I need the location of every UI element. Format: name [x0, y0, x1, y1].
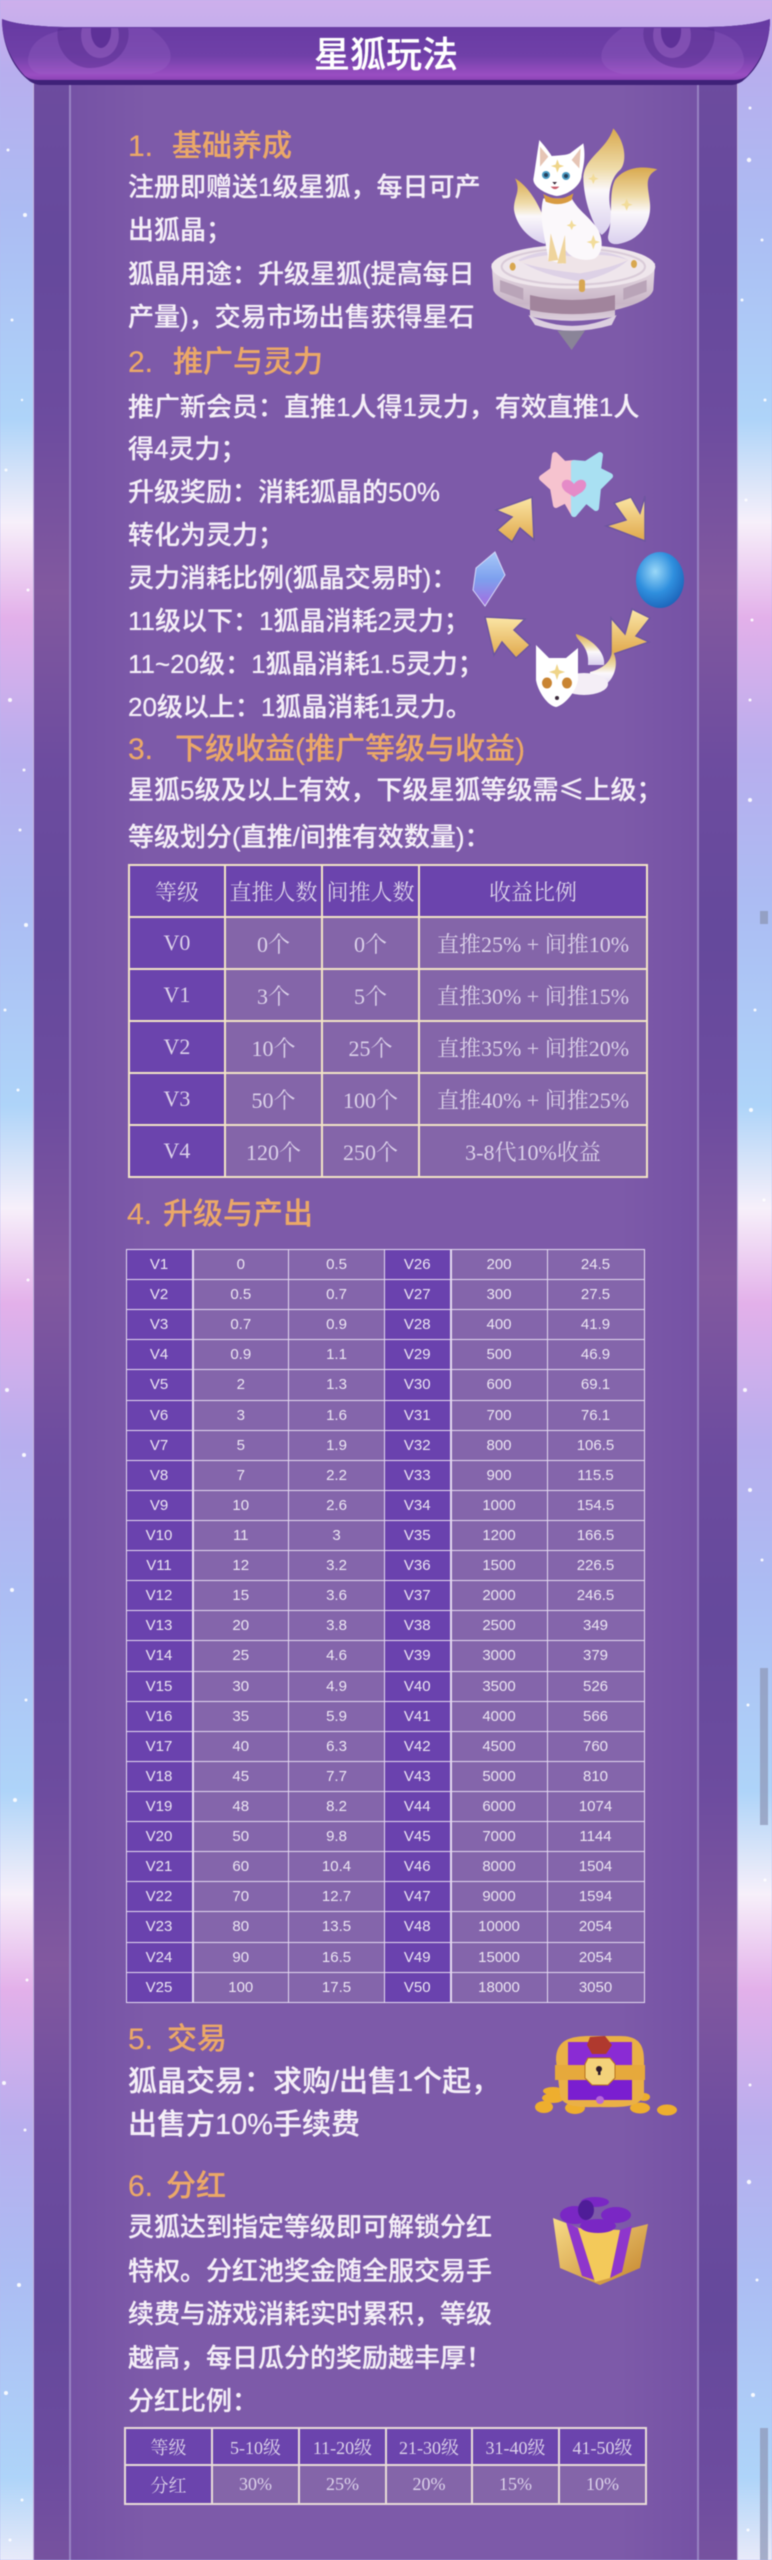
upgrade and output table: 106.5 [577, 1437, 614, 1454]
text block 1: 产量)，交易市场出售获得星石 [128, 302, 475, 332]
arrow: bottom left [485, 617, 530, 658]
upgrade and output table: 9000 [482, 1888, 516, 1905]
upgrade and output table: V18 [146, 1768, 172, 1785]
upgrade and output table: 7000 [482, 1828, 516, 1845]
upgrade and output table: V38 [404, 1617, 431, 1634]
upgrade and output table: 226.5 [577, 1557, 614, 1574]
heading 5: 5. [128, 2023, 153, 2056]
upgrade and output table: V41 [404, 1708, 431, 1725]
dividend table: 11-20级 [313, 2438, 372, 2458]
text block 6: 灵狐达到指定等级即可解锁分红 [128, 2212, 492, 2242]
text block 5: 出售方10%手续费 [128, 2109, 360, 2141]
upgrade and output table: 0.5 [326, 1256, 347, 1273]
upgrade and output table: 9.8 [326, 1828, 347, 1845]
level table: 直推40% + 间推25% [437, 1088, 629, 1112]
upgrade and output table: 60 [232, 1858, 249, 1875]
upgrade and output table: V7 [150, 1437, 168, 1454]
arrow: top right [606, 496, 645, 541]
upgrade and output table: V8 [150, 1467, 168, 1484]
upgrade and output table: 7.7 [326, 1768, 347, 1785]
dividend table: 41-50级 [572, 2438, 632, 2458]
dividend table [123, 2426, 648, 2506]
upgrade and output table: V47 [404, 1888, 431, 1905]
upgrade and output table: V40 [404, 1678, 431, 1695]
upgrade and output table: 900 [486, 1467, 512, 1484]
upgrade and output table: 379 [583, 1647, 608, 1664]
upgrade and output table: 800 [486, 1437, 512, 1454]
upgrade and output table: 45 [232, 1768, 249, 1785]
upgrade and output table: V32 [404, 1437, 431, 1454]
upgrade and output table: V6 [150, 1407, 168, 1424]
upgrade and output table: 500 [486, 1346, 512, 1363]
text block 2: 11~20级：1狐晶消耗1.5灵力； [128, 649, 484, 679]
upgrade and output table: 526 [583, 1678, 608, 1695]
upgrade and output table: 400 [486, 1316, 512, 1333]
upgrade and output table: 10 [232, 1497, 249, 1514]
dividend table: 10% [586, 2474, 619, 2494]
upgrade and output table: V48 [404, 1918, 431, 1935]
upgrade and output table: V20 [146, 1828, 172, 1845]
upgrade and output table: 18000 [478, 1979, 520, 1996]
fox collar [543, 193, 573, 204]
upgrade and output table: 25 [232, 1647, 249, 1664]
dividend table: 20% [412, 2474, 446, 2494]
heading 4: 4. [127, 1198, 152, 1231]
heading 1: 1. [128, 130, 153, 163]
upgrade and output table: V35 [404, 1527, 431, 1544]
upgrade and output table: 35 [232, 1708, 249, 1725]
level table: 3-8代10%收益 [465, 1140, 601, 1164]
upgrade and output table: 0.9 [230, 1346, 251, 1363]
heading 4: 升级与产出 [163, 1198, 313, 1231]
upgrade and output table: V42 [404, 1738, 431, 1755]
text block 2: 11级以下：1狐晶消耗2灵力； [128, 606, 470, 636]
upgrade and output table: 700 [486, 1407, 512, 1424]
upgrade and output table: 2000 [482, 1587, 516, 1604]
upgrade and output table: 810 [583, 1768, 608, 1785]
upgrade and output table: 3000 [482, 1647, 516, 1664]
upgrade and output table: 2500 [482, 1617, 516, 1634]
upgrade and output table: 115.5 [577, 1467, 614, 1484]
level table: 250个 [343, 1140, 398, 1164]
dividend table: 25% [326, 2474, 359, 2494]
upgrade and output table: 1500 [482, 1557, 516, 1574]
text block 6: 分红比例： [128, 2386, 258, 2416]
upgrade and output table: 2054 [579, 1949, 612, 1966]
upgrade and output table: 3 [237, 1407, 245, 1424]
dividend table: 15% [499, 2474, 532, 2494]
upgrade and output table: V1 [150, 1256, 168, 1273]
text block 6: 续费与游戏消耗实时累积，等级 [128, 2299, 492, 2329]
upgrade and output table: 0 [237, 1256, 245, 1273]
upgrade and output table: V46 [404, 1858, 431, 1875]
upgrade and output table: V21 [146, 1858, 172, 1875]
icon: fox on pedestal [491, 128, 657, 350]
level table: 10个 [251, 1036, 296, 1060]
upgrade and output table: 3.8 [326, 1617, 347, 1634]
heading 3: 3. [128, 733, 153, 766]
upgrade and output table: V27 [404, 1286, 431, 1303]
upgrade and output table: 12 [232, 1557, 249, 1574]
upgrade and output table [125, 1248, 646, 2004]
main content panel [69, 82, 699, 2560]
level table: 直推35% + 间推20% [437, 1036, 629, 1060]
heading 5: 交易 [167, 2023, 227, 2056]
upgrade and output table: 17.5 [322, 1979, 351, 1996]
upgrade and output table: V49 [404, 1949, 431, 1966]
upgrade and output table: 166.5 [577, 1527, 614, 1544]
title: 星狐玩法 [314, 34, 458, 75]
upgrade and output table: 20 [232, 1617, 249, 1634]
upgrade and output table: V29 [404, 1346, 431, 1363]
upgrade and output table: 154.5 [577, 1497, 614, 1514]
upgrade and output table: 76.1 [581, 1407, 610, 1424]
icon: growth cycle [473, 455, 684, 707]
text block 1 [128, 172, 480, 332]
upgrade and output table: V45 [404, 1828, 431, 1845]
level table: 等级 [155, 880, 199, 904]
text block 5: 狐晶交易：求购/出售1个起， [128, 2066, 500, 2098]
upgrade and output table: 760 [583, 1738, 608, 1755]
upgrade and output table: 11 [233, 1527, 249, 1544]
level table: 50个 [251, 1088, 296, 1112]
level table: 3个 [257, 984, 290, 1008]
dividend table: 5-10级 [230, 2438, 281, 2458]
level table: V4 [164, 1138, 190, 1163]
text block 2: 推广新会员：直推1人得1灵力，有效直推1人 [128, 392, 639, 422]
heading 3: 下级收益(推广等级与收益) [175, 733, 525, 766]
upgrade and output table: V44 [404, 1798, 431, 1815]
heading 6: 分红 [166, 2170, 226, 2203]
text block 6: 特权。分红池奖金随全服交易手 [128, 2256, 492, 2286]
upgrade and output table: 7 [237, 1467, 245, 1484]
upgrade and output table: 1200 [482, 1527, 516, 1544]
dividend table: 分红 [150, 2476, 186, 2496]
upgrade and output table: 13.5 [322, 1918, 351, 1935]
upgrade and output table: 70 [232, 1888, 249, 1905]
upgrade and output table: 2.6 [326, 1497, 347, 1514]
upgrade and output table: 0.5 [230, 1286, 251, 1303]
upgrade and output table: V39 [404, 1647, 431, 1664]
upgrade and output table: 8.2 [326, 1798, 347, 1815]
upgrade and output table: 15 [232, 1587, 249, 1604]
level table: V0 [164, 930, 190, 955]
upgrade and output table: V31 [404, 1407, 431, 1424]
upgrade and output table: 12.7 [322, 1888, 351, 1905]
heading 2: 推广与灵力 [173, 346, 323, 379]
text block 2: 转化为灵力； [128, 520, 284, 550]
level table: V1 [164, 982, 190, 1007]
upgrade and output table: V9 [150, 1497, 168, 1514]
heading 6: 6. [128, 2170, 153, 2203]
upgrade and output table: 40 [232, 1738, 249, 1755]
upgrade and output table: 3 [332, 1527, 341, 1544]
upgrade and output table: V17 [146, 1738, 172, 1755]
upgrade and output table: 27.5 [581, 1286, 610, 1303]
upgrade and output table: 0.9 [326, 1316, 347, 1333]
text block 1: 出狐晶； [128, 215, 232, 245]
upgrade and output table: 4.6 [326, 1647, 347, 1664]
level table [127, 863, 649, 1179]
upgrade and output table: 24.5 [581, 1256, 610, 1273]
upgrade and output table: 50 [232, 1828, 249, 1845]
upgrade and output table: V15 [146, 1678, 172, 1695]
text block 1: 狐晶用途：升级星狐(提高每日 [128, 259, 475, 289]
upgrade and output table: V25 [146, 1979, 172, 1996]
crystal [473, 552, 505, 606]
upgrade and output table: 4500 [482, 1738, 516, 1755]
title banner [1, 18, 771, 86]
upgrade and output table: 16.5 [322, 1949, 351, 1966]
level table: 直推30% + 间推15% [437, 984, 629, 1008]
upgrade and output table: 30 [232, 1678, 249, 1695]
upgrade and output table: V22 [146, 1888, 172, 1905]
level table: 间推人数 [326, 880, 414, 904]
text block 2: 灵力消耗比例(狐晶交易时)： [128, 563, 457, 593]
upgrade and output table: V19 [146, 1798, 172, 1815]
level table: 收益比例 [489, 880, 577, 904]
upgrade and output table: 1594 [579, 1888, 612, 1905]
text block 2: 得4灵力； [128, 434, 246, 464]
upgrade and output table: 200 [486, 1256, 512, 1273]
level table: 0个 [354, 932, 387, 956]
level table: 直推25% + 间推10% [437, 932, 629, 956]
upgrade and output table: 349 [583, 1617, 608, 1634]
upgrade and output table: 80 [232, 1918, 249, 1935]
upgrade and output table: 69.1 [581, 1376, 610, 1393]
icon: gift box [553, 2197, 648, 2285]
text block 3 [128, 770, 662, 852]
text block 5 [128, 2065, 500, 2141]
level table: 100个 [343, 1088, 398, 1112]
upgrade and output table: V3 [150, 1316, 168, 1333]
upgrade and output table: 1.9 [326, 1437, 347, 1454]
upgrade and output table: 3500 [482, 1678, 516, 1695]
upgrade and output table: V13 [146, 1617, 172, 1634]
heading 5 [128, 2022, 227, 2056]
upgrade and output table: 5000 [482, 1768, 516, 1785]
upgrade and output table: V24 [146, 1949, 172, 1966]
upgrade and output table: 5.9 [326, 1708, 347, 1725]
upgrade and output table: V34 [404, 1497, 431, 1514]
upgrade and output table: V26 [404, 1256, 431, 1273]
upgrade and output table: V12 [146, 1587, 172, 1604]
star pair [542, 455, 610, 514]
upgrade and output table: 15000 [478, 1949, 520, 1966]
text block 6 [128, 2212, 492, 2416]
upgrade and output table: 300 [486, 1286, 512, 1303]
upgrade and output table: 0.7 [326, 1286, 347, 1303]
upgrade and output table: 3050 [579, 1979, 612, 1996]
dividend table: 等级 [150, 2438, 186, 2458]
upgrade and output table: 6.3 [326, 1738, 347, 1755]
pedestal [491, 245, 655, 350]
level table: 0个 [257, 932, 290, 956]
upgrade and output table: 1.1 [326, 1346, 347, 1363]
upgrade and output table: V28 [404, 1316, 431, 1333]
upgrade and output table: 1.3 [326, 1376, 347, 1393]
upgrade and output table: V33 [404, 1467, 431, 1484]
upgrade and output table: V50 [404, 1979, 431, 1996]
upgrade and output table: 566 [583, 1708, 608, 1725]
upgrade and output table: 6000 [482, 1798, 516, 1815]
orb [636, 552, 684, 608]
text block 2: 升级奖励：消耗狐晶的50% [128, 477, 440, 507]
upgrade and output table: 10.4 [322, 1858, 351, 1875]
dividend table: 21-30级 [399, 2438, 459, 2458]
text block 6: 越高，每日瓜分的奖励越丰厚！ [128, 2342, 492, 2372]
heading 2: 2. [128, 346, 153, 379]
fox head [533, 140, 584, 196]
text block 3: 星狐5级及以上有效，下级星狐等级需≤上级； [128, 770, 662, 807]
fox tails [583, 128, 624, 235]
upgrade and output table: V37 [404, 1587, 431, 1604]
upgrade and output table: 10000 [478, 1918, 520, 1935]
level table: 25个 [348, 1036, 392, 1060]
dividend table: 31-40级 [486, 2438, 546, 2458]
level table: V3 [164, 1086, 190, 1111]
text block 1: 注册即赠送1级星狐，每日可产 [128, 172, 480, 202]
upgrade and output table: 1074 [579, 1798, 612, 1815]
fox cub [536, 634, 616, 707]
upgrade and output table: V36 [404, 1557, 431, 1574]
upgrade and output table: 48 [232, 1798, 249, 1815]
icon: treasure chest [535, 2036, 677, 2116]
level table: 5个 [354, 984, 387, 1008]
text block 2 [128, 392, 640, 722]
upgrade and output table: 1504 [579, 1858, 612, 1875]
upgrade and output table: 246.5 [577, 1587, 614, 1604]
upgrade and output table: 90 [232, 1949, 249, 1966]
upgrade and output table: 2054 [579, 1918, 612, 1935]
upgrade and output table: 600 [486, 1376, 512, 1393]
upgrade and output table: V14 [146, 1647, 172, 1664]
text block 2: 20级以上：1狐晶消耗1灵力。 [128, 692, 472, 722]
upgrade and output table: V30 [404, 1376, 431, 1393]
upgrade and output table: 4.9 [326, 1678, 347, 1695]
level table: 120个 [246, 1140, 301, 1164]
upgrade and output table: V10 [146, 1527, 172, 1544]
upgrade and output table: 4000 [482, 1708, 516, 1725]
fox body [542, 198, 602, 264]
arrow: top left [496, 497, 534, 542]
upgrade and output table: V5 [150, 1376, 168, 1393]
upgrade and output table: 2.2 [326, 1467, 347, 1484]
arrow: bottom right [611, 609, 650, 655]
level table: 直推人数 [229, 880, 318, 904]
upgrade and output table: 3.6 [326, 1587, 347, 1604]
upgrade and output table: 46.9 [581, 1346, 610, 1363]
upgrade and output table: V23 [146, 1918, 172, 1935]
upgrade and output table: V16 [146, 1708, 172, 1725]
upgrade and output table: 41.9 [581, 1316, 610, 1333]
upgrade and output table: 3.2 [326, 1557, 347, 1574]
upgrade and output table: V11 [146, 1557, 172, 1574]
upgrade and output table: 5 [237, 1437, 245, 1454]
upgrade and output table: 100 [228, 1979, 253, 1996]
text block 3: 等级划分(直推/间推有效数量)： [128, 822, 491, 852]
upgrade and output table: 8000 [482, 1858, 516, 1875]
upgrade and output table: V2 [150, 1286, 168, 1303]
dividend table: 30% [239, 2474, 272, 2494]
upgrade and output table: 0.7 [230, 1316, 251, 1333]
upgrade and output table: V4 [150, 1346, 168, 1363]
upgrade and output table: 2 [237, 1376, 245, 1393]
upgrade and output table: 1.6 [326, 1407, 347, 1424]
upgrade and output table: V43 [404, 1768, 431, 1785]
upgrade and output table: 1000 [482, 1497, 516, 1514]
heading 1: 基础养成 [172, 130, 292, 163]
upgrade and output table: 1144 [579, 1828, 612, 1845]
level table: V2 [164, 1034, 190, 1059]
heading 6 [128, 2170, 226, 2203]
